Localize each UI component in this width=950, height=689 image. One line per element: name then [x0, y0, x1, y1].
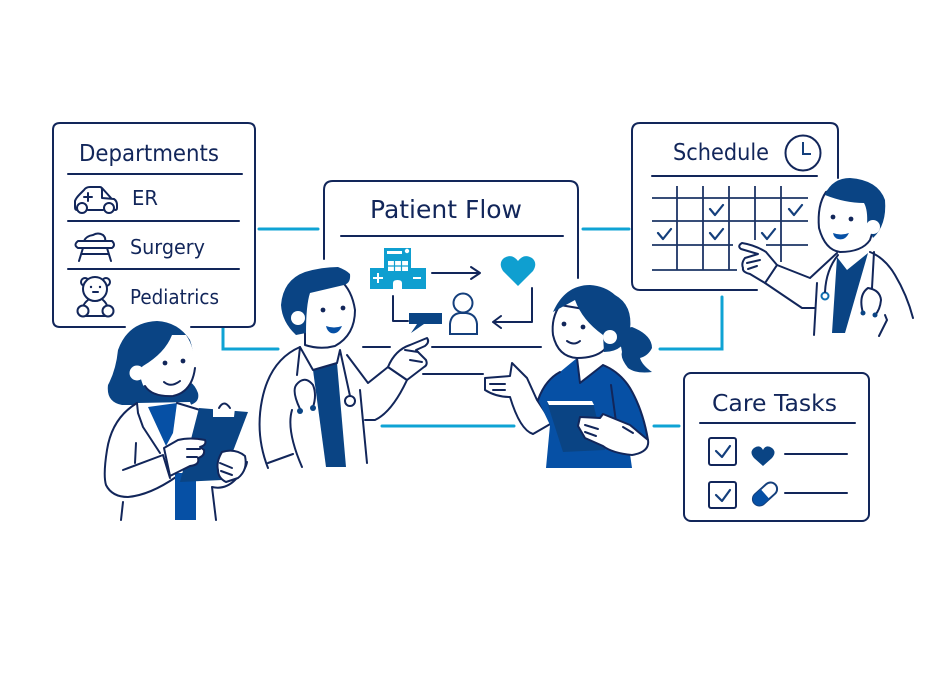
connectors between panels [223, 229, 722, 426]
icon: speech bubble [409, 313, 442, 333]
heading: care tasks: Care Tasks [712, 391, 837, 417]
icon: heart [501, 256, 535, 286]
head [819, 185, 878, 252]
icon: clock [786, 136, 820, 170]
panel: departments [53, 123, 255, 327]
person: doctor pointing [260, 267, 428, 468]
coat and arm [260, 347, 407, 468]
stethoscope [822, 255, 881, 318]
heading: schedule: Schedule [673, 140, 769, 166]
arrow: heart to patient [493, 288, 532, 328]
hand pointing [739, 243, 777, 283]
scrub trousers [175, 473, 196, 520]
coat [105, 402, 205, 497]
smile [326, 326, 342, 333]
panel: schedule [632, 123, 838, 290]
scrubs [538, 358, 648, 468]
icon: hospital [370, 248, 426, 289]
heading: patient flow: Patient Flow [370, 195, 522, 224]
checkmarks [658, 205, 802, 239]
heading: departments: Departments [79, 141, 219, 167]
hair [553, 285, 630, 352]
face [553, 305, 610, 358]
icon: patient [450, 294, 477, 334]
arrow: hospital to heart [432, 267, 480, 279]
panel: patient flow [324, 181, 578, 374]
panel: care tasks [684, 373, 869, 521]
coat and arm [765, 252, 913, 335]
person: doctor at schedule [739, 178, 913, 336]
head [305, 280, 355, 348]
ponytail [618, 327, 652, 372]
icon: teddy bear [78, 277, 114, 316]
hair [108, 321, 198, 405]
clipboard [180, 408, 248, 482]
label: surgery: Surgery [130, 235, 205, 259]
icon: ambulance [75, 187, 117, 213]
calendar grid [652, 186, 808, 270]
scrub top [148, 403, 177, 446]
icon: surgery table [76, 234, 114, 261]
tablet [547, 402, 605, 452]
task: heart item [709, 438, 847, 466]
face [140, 335, 195, 396]
stethoscope [295, 380, 355, 414]
hair [825, 178, 885, 238]
arrow: chat to hospital [393, 296, 408, 321]
arm and hand [485, 363, 552, 434]
person: doctor with clipboard [105, 321, 248, 520]
label: ER: ER [132, 186, 158, 210]
hand pointing [388, 338, 428, 380]
forearm [578, 414, 648, 455]
task: pill item [709, 480, 847, 508]
hands [164, 438, 205, 476]
person: nurse with tablet [485, 285, 652, 468]
scrub [313, 363, 346, 467]
scrub [832, 253, 868, 333]
smile [833, 233, 849, 239]
label: pediatrics: Pediatrics [130, 285, 219, 309]
hair [281, 267, 350, 335]
